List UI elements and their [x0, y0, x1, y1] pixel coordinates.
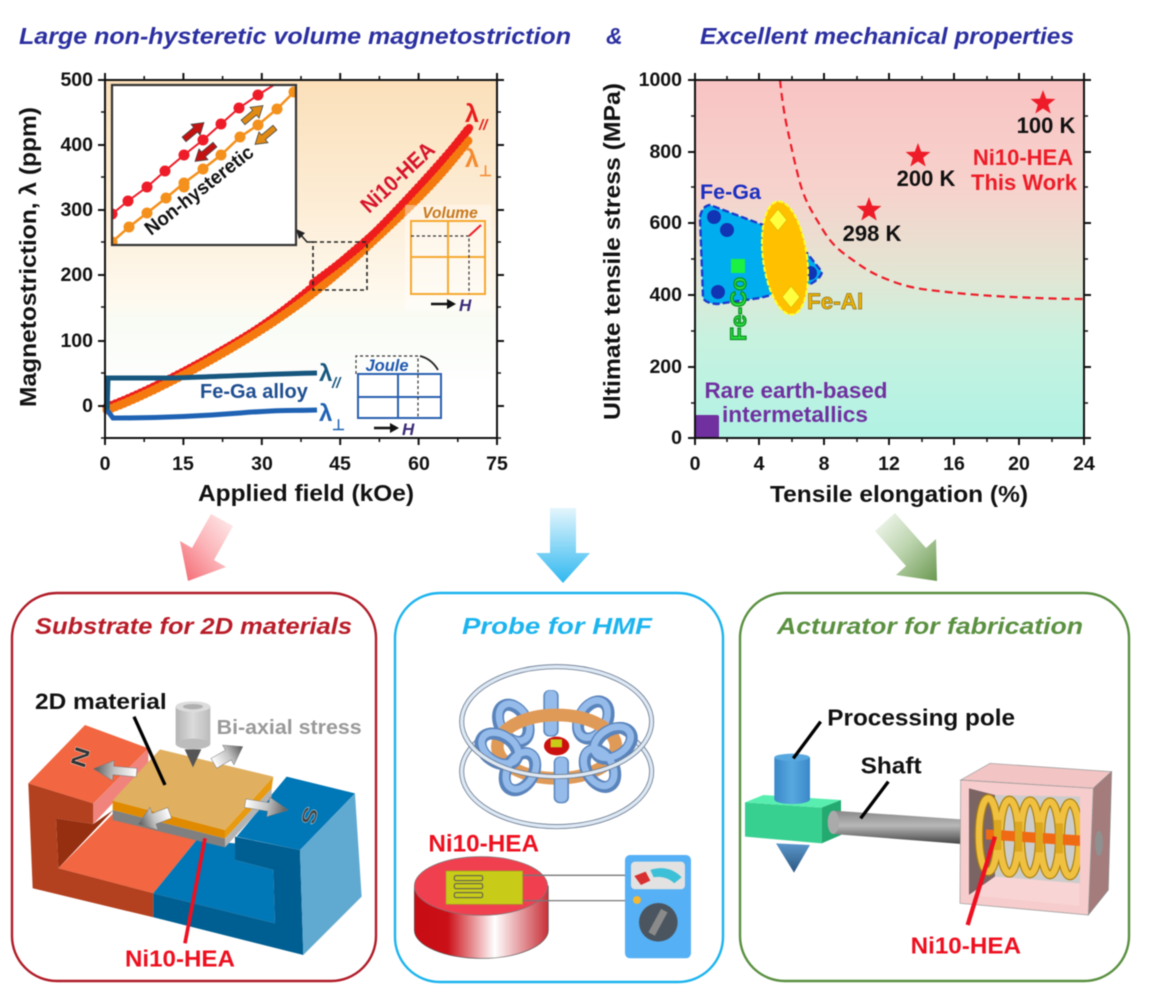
inset label: Non-hysteretic: Non-hysteretic	[141, 141, 258, 240]
chart 2 x tick labels: 24	[1073, 453, 1095, 475]
spring box	[960, 763, 1112, 915]
label: lambda perpendicular orange: λ	[465, 145, 479, 173]
title: large non-hysteretic volume magnetostriction: Large non-hysteretic volume magnetostriction	[19, 23, 571, 49]
star labels: 100 K	[1017, 113, 1075, 138]
chart 2 x tick labels: 20	[1008, 453, 1030, 475]
label: Fe-Al: Fe-Al	[807, 289, 863, 314]
chart 2 y tick labels: 400	[649, 284, 682, 306]
label: Ni10-HEA rotated: Ni10-HEA	[355, 137, 440, 218]
leader line: Ni10-HEA	[185, 838, 205, 943]
processing pole cylinder	[774, 754, 810, 804]
chart: ultimate tensile stress vs elongation	[599, 69, 1095, 507]
pressing pole	[176, 701, 210, 767]
title: ampersand: &	[606, 23, 623, 49]
schematic: Joule magnetostriction: Joule	[365, 357, 409, 375]
schematic: Joule magnetostriction	[356, 356, 441, 439]
chart 1 y tick labels: 400	[60, 134, 93, 156]
schematic: volume magnetostriction: H	[459, 296, 472, 315]
lower Helmholtz ring	[462, 717, 652, 827]
chart 2 x tick labels: 4	[754, 453, 765, 475]
chart 2 y tick labels: 800	[649, 141, 682, 163]
Bi-axial stress label: Bi-axial stress	[217, 716, 362, 739]
illustration: magnet with plate	[28, 689, 362, 972]
chart 2 y tick labels: 1000	[639, 69, 682, 91]
label: lambda parallel blue	[319, 360, 342, 392]
chart 1 y tick labels	[60, 69, 93, 417]
label: lambda perpendicular blue: λ	[319, 400, 332, 427]
label: rare earth intermetallics	[704, 378, 888, 427]
arrow: to probe panel	[536, 508, 590, 583]
chart 2 y tick labels: 200	[649, 356, 682, 378]
arrow: to actuator panel	[875, 513, 937, 581]
stress arrows	[93, 737, 290, 836]
label: Ni10-HEA This Work: Ni10-HEA	[973, 145, 1073, 170]
chart 1 curve: Fe-Ga lambda perpendicular	[107, 410, 317, 418]
leader line: shaft	[861, 782, 888, 818]
chart 2 x tick labels: 12	[878, 453, 900, 475]
schematic: Joule magnetostriction: H	[402, 420, 415, 439]
label: lambda parallel blue: λ	[319, 360, 332, 387]
arrow: zoom box to inset	[296, 229, 313, 242]
panel heading: probe: Probe for HMF	[462, 613, 653, 639]
processing pole cone	[776, 843, 810, 873]
inset arrows	[180, 100, 279, 167]
chart 1 x tick labels: 75	[486, 453, 508, 475]
label: Ni10-HEA This Work	[971, 145, 1078, 195]
panel: actuator for fabrication	[740, 593, 1129, 981]
front coils	[475, 720, 637, 803]
center sample	[544, 737, 569, 755]
chart 1 y tick labels: 200	[60, 264, 93, 286]
panel heading: actuator: Acturator for fabrication	[776, 613, 1083, 639]
leader line: processing pole	[793, 722, 821, 758]
chart 2 x axis label: Tensile elongation (%)	[770, 481, 1028, 507]
Shaft label: Shaft	[861, 752, 922, 778]
Processing pole label: Processing pole	[827, 705, 1015, 731]
Fe-Ga data points	[707, 210, 817, 299]
label: lambda parallel red: λ	[465, 100, 479, 128]
chart 1 y tick labels: 100	[60, 330, 93, 352]
chart 1 x tick labels: 0	[100, 453, 111, 475]
star labels	[843, 113, 1075, 246]
star labels: 298 K	[843, 221, 901, 246]
2D material label: 2D material	[35, 689, 167, 714]
chart 2 y tick labels	[639, 69, 682, 449]
chart 1 y tick labels: 0	[82, 395, 93, 417]
upper Helmholtz ring	[462, 667, 652, 777]
Ni10-HEA label: Ni10-HEA	[428, 831, 539, 858]
chart 1 x tick labels: 30	[251, 453, 273, 475]
chart 2 x tick labels: 16	[943, 453, 965, 475]
title: excellent mechanical properties: Excellent mechanical properties	[700, 23, 1074, 49]
multimeter	[625, 855, 691, 958]
label: lambda perpendicular orange: ⊥	[479, 163, 492, 180]
Fe-Co label: Fe-Co	[726, 277, 751, 341]
zoom box	[313, 242, 367, 290]
chart 1 x tick labels: 60	[408, 453, 430, 475]
green holder	[745, 795, 841, 843]
chart 1 curve: Fe-Ga lambda parallel	[107, 373, 317, 413]
stars: Ni10-HEA data	[857, 90, 1055, 220]
label: lambda parallel red	[465, 100, 489, 134]
label: rare earth intermetallics: Rare earth-based	[704, 378, 888, 403]
panel: probe for HMF	[395, 593, 723, 982]
dashed strength-ductility curve	[780, 80, 1083, 299]
chart 1 x tick labels: 45	[329, 453, 351, 475]
inset red series	[106, 83, 277, 220]
label: lambda parallel blue: //	[331, 375, 342, 392]
inset: non-hysteretic zoom	[106, 83, 300, 248]
Fe-Al data points	[769, 209, 800, 308]
chart 2 x tick labels: 8	[819, 453, 830, 475]
illustration: coil and probe	[414, 667, 691, 958]
region: Fe-Ga	[700, 205, 822, 304]
chart 2 y axis label: Ultimate tensile stress (MPa)	[599, 83, 625, 420]
chart 1 y axis label: Magnetostriction, λ (ppm)	[15, 107, 41, 407]
label: Ni10-HEA This Work: This Work	[971, 170, 1078, 195]
region: Fe-Al	[756, 199, 814, 317]
sample plates	[113, 749, 273, 847]
chart 2 y tick labels: 0	[671, 427, 682, 449]
disk sample with strain gauge	[414, 857, 548, 958]
spring back turns	[979, 798, 1079, 876]
chart 1 y tick labels: 500	[60, 69, 93, 91]
chart 1 curve: Ni10-HEA	[107, 127, 470, 410]
chart 1 x axis label: Applied field (kOe)	[198, 480, 414, 506]
rare earth marker	[695, 415, 719, 438]
spring front turns	[998, 820, 1059, 853]
wires	[523, 875, 625, 901]
chart 2 x tick labels	[690, 453, 1095, 475]
chart 2 x tick labels: 0	[690, 453, 701, 475]
S pole of magnet	[153, 777, 362, 955]
Ni10-HEA rod	[986, 829, 1080, 846]
arrow: to substrate panel	[180, 514, 233, 581]
illustration: actuator	[745, 705, 1112, 958]
label: Fe-Ga alloy: Fe-Ga alloy	[200, 381, 309, 403]
label: lambda perpendicular blue: ⊥	[332, 417, 345, 434]
label: rare earth intermetallics: intermetallics	[722, 402, 868, 427]
chart 2 y tick labels: 600	[649, 212, 682, 234]
torus	[497, 715, 616, 778]
chart 1 frame and ticks	[98, 73, 504, 445]
N label: N	[65, 743, 94, 771]
label: lambda parallel red: //	[478, 117, 489, 134]
chart 1 x tick labels	[100, 453, 508, 475]
schematic: volume magnetostriction	[405, 205, 491, 315]
label: lambda perpendicular blue	[319, 400, 345, 434]
chart: magnetostriction vs applied field	[15, 69, 508, 506]
chart 2 frame and ticks	[688, 73, 1091, 445]
star labels: 200 K	[897, 166, 955, 191]
label: Fe-Ga: Fe-Ga	[700, 180, 762, 204]
Ni10-HEA label: Ni10-HEA	[911, 932, 1021, 958]
shaft	[828, 811, 962, 844]
Ni10-HEA label: Ni10-HEA	[125, 946, 235, 972]
panel: substrate for 2D materials	[12, 593, 376, 981]
S label: S	[296, 804, 323, 828]
Fe-Co marker	[731, 259, 745, 273]
label: lambda perpendicular orange	[465, 145, 492, 180]
inset orange series	[106, 86, 300, 248]
chart 1 x tick labels: 15	[172, 453, 194, 475]
leader line: Ni10-HEA	[968, 837, 995, 925]
leader line: 2D material	[134, 717, 165, 785]
chart 1 y tick labels: 300	[60, 199, 93, 221]
panel heading: substrate: Substrate for 2D materials	[35, 613, 352, 639]
N pole of magnet	[28, 725, 197, 917]
back coils	[492, 690, 615, 747]
schematic: volume magnetostriction: Volume	[422, 205, 478, 222]
